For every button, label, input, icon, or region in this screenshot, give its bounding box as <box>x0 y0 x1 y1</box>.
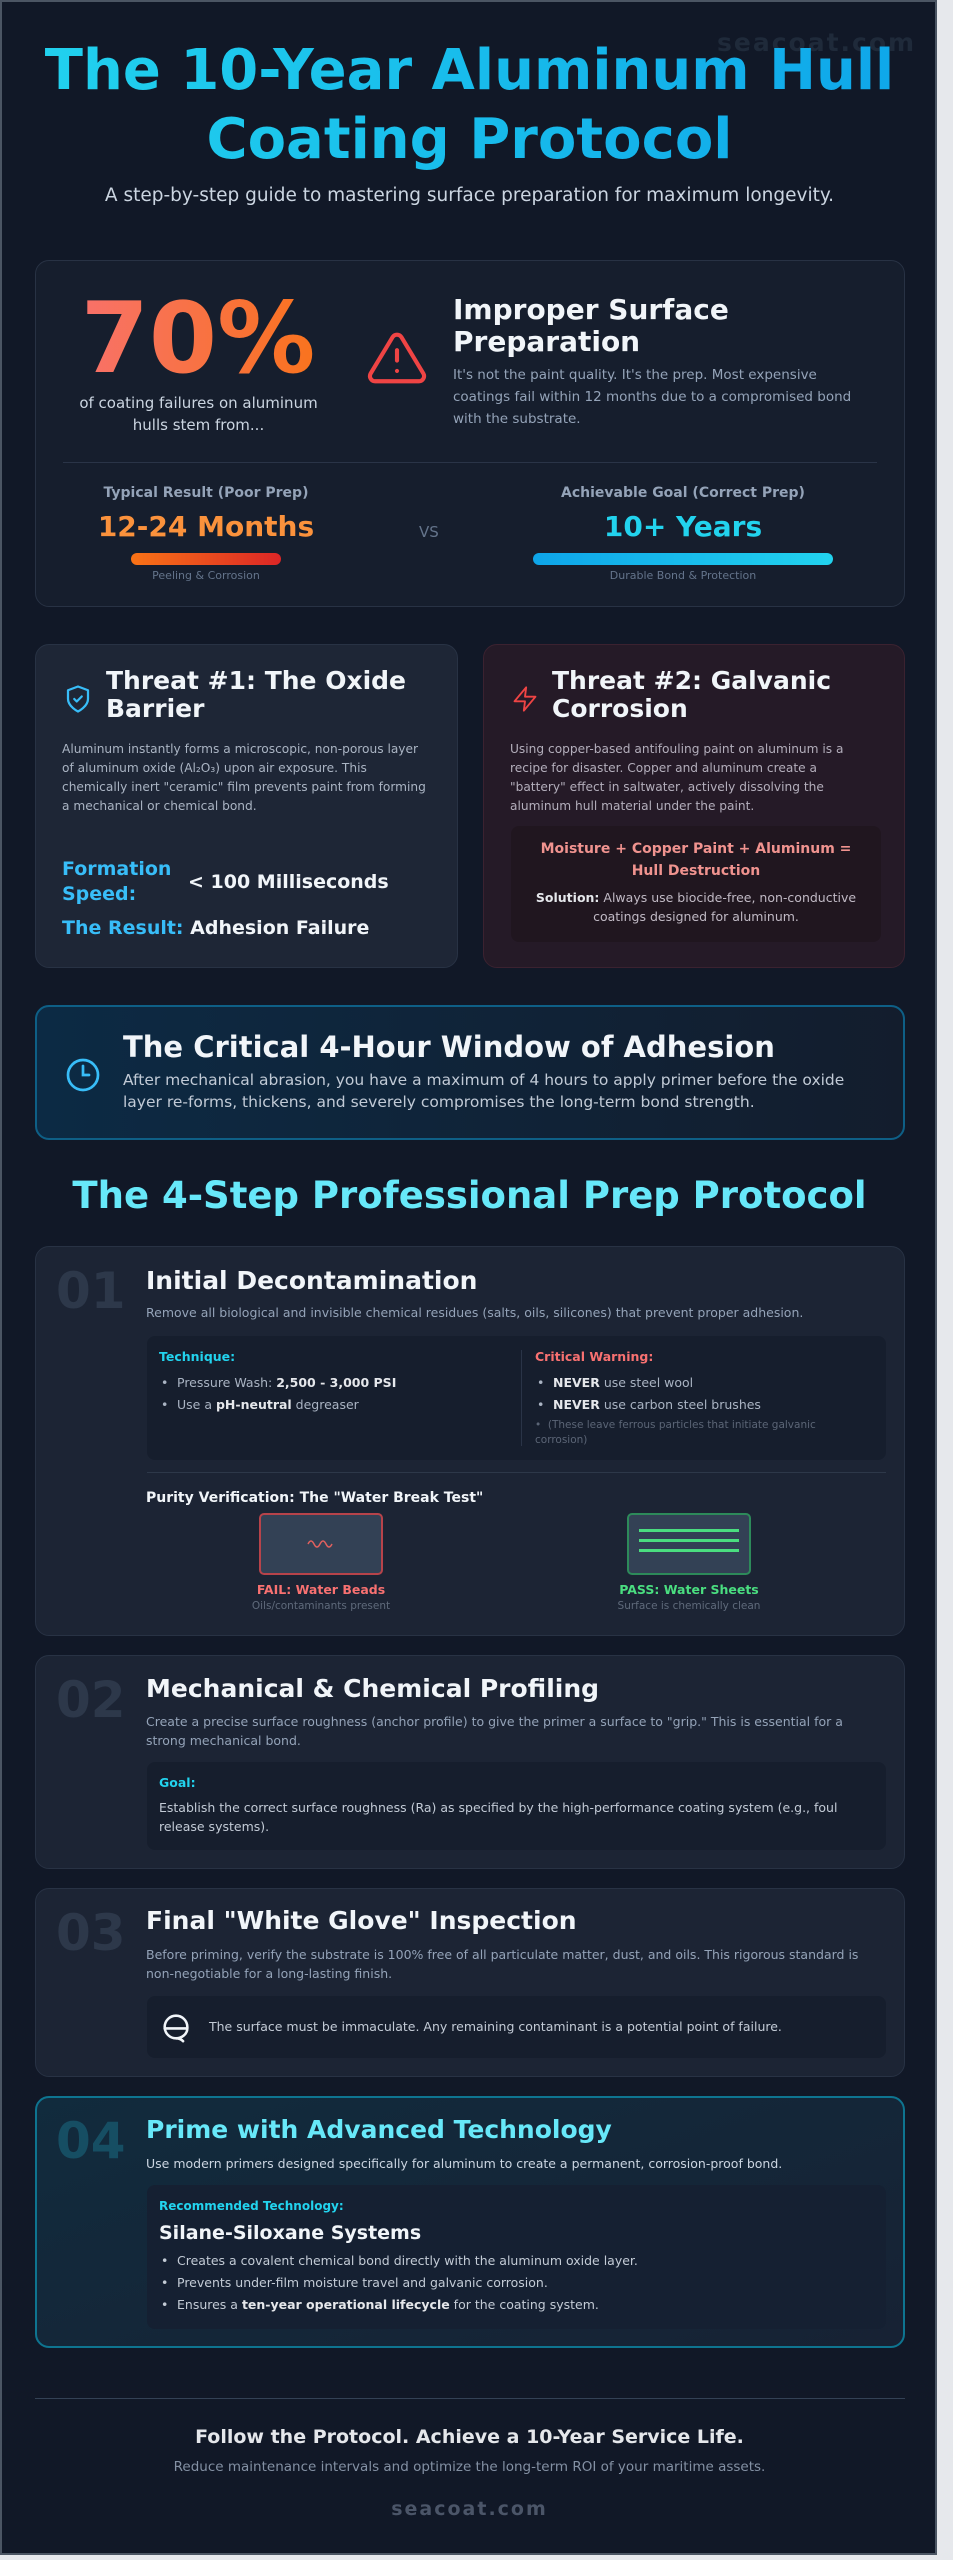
technique: Use a pH-neutral degreaser <box>177 1397 359 1412</box>
step desc: Use modern primers designed specifically for aluminum to create a permanent, corrosion-proof bond. <box>146 2156 782 2171</box>
comparison: correct prep: Durable Bond & Protection <box>610 569 756 582</box>
icon: shield <box>66 685 90 713</box>
footer brand: seacoat.com <box>391 2498 548 2520</box>
recommended technology box <box>147 2185 886 2329</box>
step title: Prime with Advanced Technology <box>146 2115 612 2144</box>
comparison: correct prep: Achievable Goal (Correct Prep) <box>561 485 805 501</box>
step number: 03 <box>56 1904 126 1962</box>
panel: 4-hour window <box>35 1005 905 1140</box>
callout box <box>147 1996 886 2058</box>
heading: Threat #1: The Oxide Barrier <box>106 666 406 723</box>
description: It's not the paint quality. It's the prep. Most expensive coatings fail within 12 months due to a compromised bond with the substrate. <box>453 367 851 427</box>
title: Coating Protocol <box>206 107 732 172</box>
section heading: The 4-Step Professional Prep Protocol <box>72 1174 867 1217</box>
technique: Technique: <box>159 1349 235 1364</box>
technique: Pressure Wash: 2,500 - 3,000 PSI <box>177 1375 396 1390</box>
icon: clock <box>66 1058 100 1092</box>
panel: threat 2 <box>483 644 905 968</box>
comparison: poor prep: Typical Result (Poor Prep) <box>104 485 308 501</box>
step number: 01 <box>56 1262 126 1320</box>
critical warning: Critical Warning: <box>535 1349 653 1364</box>
panel: threat 1 <box>35 644 458 968</box>
recommended technology box: Prevents under-film moisture travel and galvanic corrosion. <box>177 2275 548 2290</box>
test: pass: PASS: Water Sheets <box>619 1582 759 1597</box>
stat: result: The Result: Adhesion Failure <box>62 917 369 939</box>
step number: 04 <box>56 2112 126 2170</box>
heading: The Critical 4-Hour Window of Adhesion <box>123 1030 775 1064</box>
comparison: correct prep: 10+ Years <box>604 510 762 543</box>
panel: technique / warning <box>147 1336 886 1460</box>
footer heading: Follow the Protocol. Achieve a 10-Year Service Life. <box>195 2426 744 2448</box>
test: fail <box>252 1513 390 1612</box>
panel: step 4 <box>35 2096 905 2348</box>
panel: step 1 <box>35 1246 905 1636</box>
body: After mechanical abrasion, you have a maximum of 4 hours to apply primer before the oxide layer re-forms, thickens, and severely compromises the long-term bond strength. <box>123 1071 844 1111</box>
comparison: poor prep: 12-24 Months <box>98 510 314 543</box>
goal box <box>147 1762 886 1850</box>
heading: Threat #2: Galvanic Corrosion <box>552 666 831 723</box>
panel: stat card <box>35 260 905 607</box>
critical warning: NEVER use steel wool <box>553 1375 693 1390</box>
comparison: poor prep <box>98 485 314 582</box>
step number: 02 <box>56 1671 126 1729</box>
icon: glove <box>163 2014 189 2042</box>
stat caption: of coating failures on aluminum hulls stem from... <box>79 394 318 434</box>
purity heading: Purity Verification: The "Water Break Test" <box>146 1490 483 1506</box>
icon: warning <box>368 332 426 384</box>
step desc: Create a precise surface roughness (anchor profile) to give the primer a surface to "grip." This is essential for a strong mechanical bond. <box>146 1714 843 1748</box>
body: Using copper-based antifouling paint on aluminum is a recipe for disaster. Copper and aluminum create a "battery" effect in saltwater, actively dissolving the aluminum hull material under the paint. <box>510 742 843 813</box>
technique <box>159 1349 396 1412</box>
goal box: Goal: <box>159 1775 196 1790</box>
test: pass <box>618 1513 760 1612</box>
panel: step 3 <box>35 1888 905 2077</box>
heading: improper surface preparation: Improper Surface Preparation <box>453 293 729 358</box>
body: Aluminum instantly forms a microscopic, non-porous layer of aluminum oxide (Al₂O₃) upon air exposure. This chemically inert "ceramic" film prevents paint from forming a mechanical or chemical bond. <box>62 742 426 813</box>
step title: Final "White Glove" Inspection <box>146 1906 577 1935</box>
recommended technology box: Creates a covalent chemical bond directly with the aluminum oxide layer. <box>177 2253 638 2268</box>
subtitle: A step-by-step guide to mastering surface preparation for maximum longevity. <box>105 185 834 206</box>
callout text: The surface must be immaculate. Any remaining contaminant is a potential point of failure. <box>209 2019 782 2034</box>
step desc: Remove all biological and invisible chemical residues (salts, oils, silicones) that prevent proper adhesion. <box>146 1305 803 1320</box>
test: fail: Oils/contaminants present <box>252 1600 390 1612</box>
title <box>2 36 937 174</box>
callout: equation: Moisture + Copper Paint + Aluminum = Hull Destruction <box>541 841 851 879</box>
title: The 10-Year Aluminum Hull <box>45 38 894 103</box>
recommended technology box: Silane-Siloxane Systems <box>159 2222 421 2244</box>
comparison: poor prep: Peeling & Corrosion <box>152 569 260 582</box>
step title: Mechanical & Chemical Profiling <box>146 1674 599 1703</box>
watermark: seacoat.com <box>717 28 916 57</box>
step title: Initial Decontamination <box>146 1266 477 1295</box>
icon: lightning <box>514 686 536 712</box>
goal box: Establish the correct surface roughness (Ra) as specified by the high-performance coating system (e.g., foul release systems). <box>159 1800 837 1834</box>
critical warning: • (These leave ferrous particles that initiate galvanic corrosion) <box>535 1419 816 1446</box>
callout: equation <box>511 826 881 942</box>
panel: step 2 <box>35 1655 905 1869</box>
panel: threat 1: < 100 Milliseconds <box>188 871 389 893</box>
stat: formation speed: Formation Speed: <box>62 858 171 905</box>
stat: 70%: 70% <box>81 282 315 396</box>
test: fail: FAIL: Water Beads <box>257 1582 385 1597</box>
critical warning: NEVER use carbon steel brushes <box>553 1397 761 1412</box>
recommended technology box: Recommended Technology: <box>159 2199 344 2213</box>
test: pass: Surface is chemically clean <box>618 1600 760 1612</box>
critical warning <box>535 1349 816 1446</box>
vs: VS <box>419 523 439 541</box>
comparison: correct prep <box>533 485 833 582</box>
step desc: Before priming, verify the substrate is 100% free of all particulate matter, dust, and oils. This rigorous standard is non-negotiable for a long-lasting finish. <box>146 1947 858 1981</box>
footer subtitle: Reduce maintenance intervals and optimize the long-term ROI of your maritime assets. <box>174 2459 765 2475</box>
callout: equation: Solution: Always use biocide-free, non-conductive coatings designed for aluminum. <box>536 890 856 924</box>
recommended technology box: Ensures a ten-year operational lifecycle for the coating system. <box>177 2297 599 2312</box>
